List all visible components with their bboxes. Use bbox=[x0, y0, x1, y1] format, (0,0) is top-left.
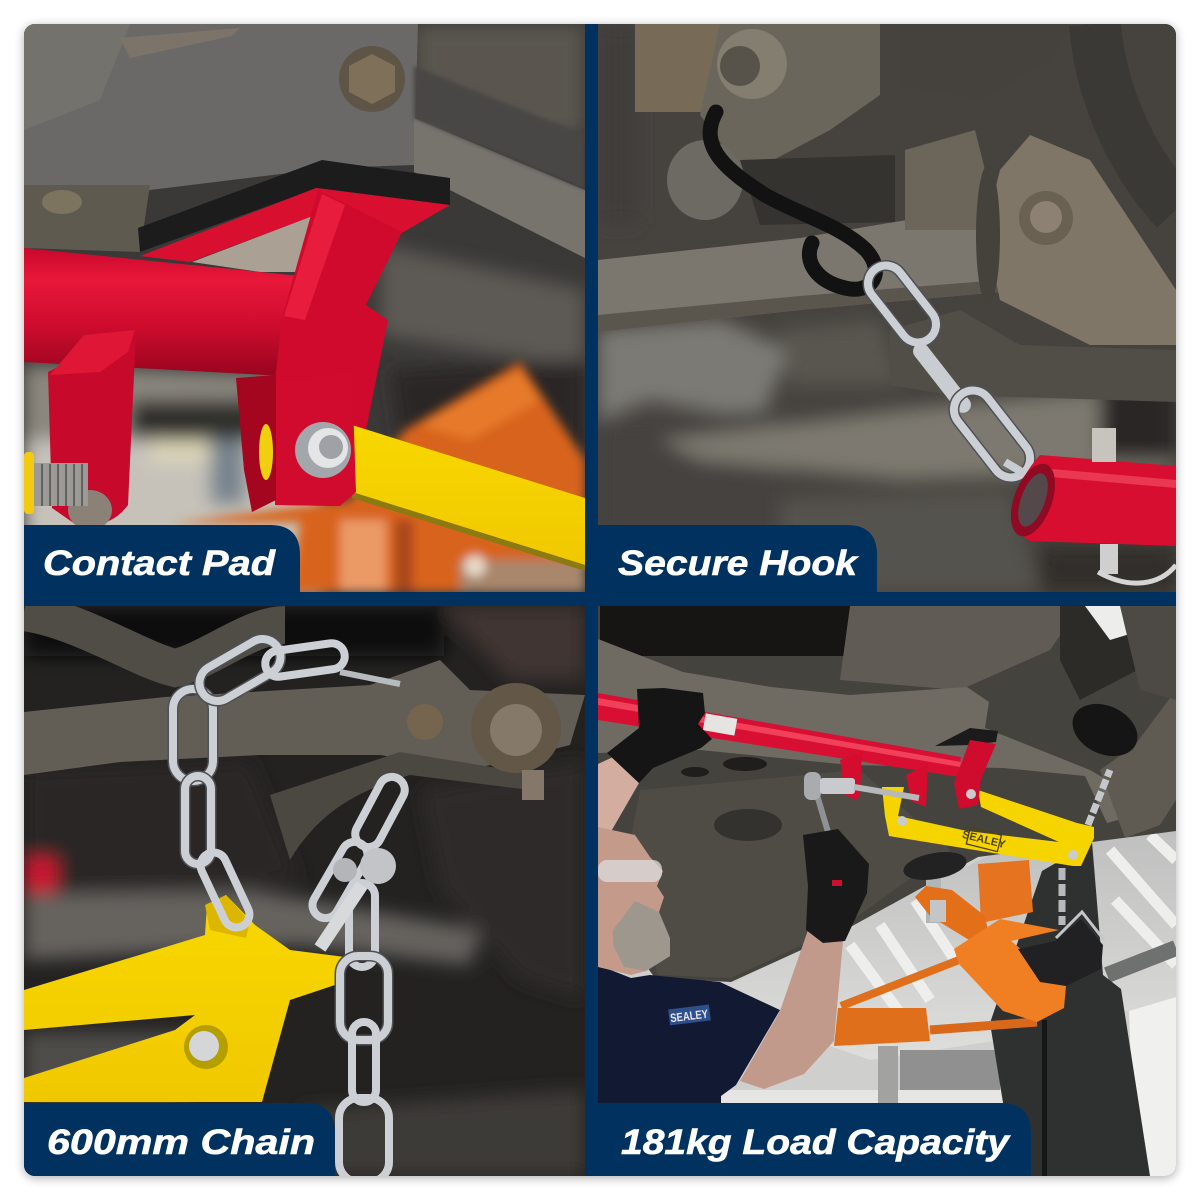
hanging chain bbox=[1058, 868, 1066, 925]
red tube bbox=[24, 248, 300, 376]
red bracket bbox=[954, 740, 996, 809]
bolt bbox=[339, 46, 405, 112]
crossmember bbox=[598, 639, 1158, 823]
lift post bbox=[990, 842, 1150, 1176]
suspension arm bbox=[598, 220, 998, 318]
suspension arm bbox=[414, 118, 585, 258]
mid junk bbox=[890, 310, 1176, 402]
chain bbox=[862, 260, 1036, 483]
yellow bar bbox=[352, 425, 585, 565]
label: contact pad bbox=[24, 525, 300, 592]
ratchet bbox=[804, 772, 919, 832]
hose bbox=[1095, 24, 1176, 210]
hub bbox=[1100, 690, 1176, 838]
label: contact pad: Contact Pad bbox=[43, 544, 276, 583]
cv boot bbox=[1072, 704, 1138, 756]
top assembly bbox=[635, 24, 720, 112]
right arm bbox=[740, 930, 843, 1089]
label: 600mm chain: 600mm Chain bbox=[47, 1123, 315, 1162]
mechanic: SEALEY bbox=[669, 1007, 709, 1025]
mechanic bbox=[598, 688, 869, 1176]
small lower bracket bbox=[48, 332, 136, 525]
orange jack background bbox=[170, 362, 585, 592]
red tube bbox=[1015, 455, 1176, 546]
gloves bbox=[607, 688, 712, 783]
label: 600mm chain bbox=[24, 1103, 335, 1176]
label: secure hook bbox=[585, 525, 877, 592]
workshop background bbox=[610, 856, 1176, 1176]
vehicle underside bbox=[598, 606, 1176, 982]
panel: 181kg load capacity bbox=[598, 606, 1176, 1176]
black hook bbox=[710, 112, 875, 289]
yellow frame bbox=[882, 787, 1094, 866]
chassis member bbox=[24, 24, 418, 190]
panel: secure hook bbox=[598, 24, 1176, 592]
chains bbox=[173, 632, 409, 1182]
left arm bbox=[598, 757, 639, 868]
red tube bbox=[598, 693, 961, 777]
black saddle bbox=[1018, 919, 1103, 986]
contact pad bbox=[138, 160, 450, 252]
orange jack bbox=[834, 848, 1066, 1046]
label: secure hook: Secure Hook bbox=[618, 544, 859, 583]
yellow arm bbox=[24, 895, 345, 1102]
lower panel of polo bbox=[598, 1100, 721, 1176]
polo bbox=[598, 965, 780, 1110]
SEALEY logo: SEALEY bbox=[961, 829, 1007, 851]
panel: 600mm chain bbox=[24, 606, 585, 1182]
panel: contact pad bbox=[24, 24, 585, 592]
label: 181kg load capacity bbox=[585, 1103, 1031, 1176]
label: 181kg load capacity: 181kg Load Capacity bbox=[621, 1123, 1011, 1162]
upper curved arm bbox=[24, 612, 285, 668]
head bbox=[598, 827, 670, 975]
bracket front plate bbox=[278, 425, 356, 506]
red bracket bbox=[275, 190, 402, 506]
pivot bolt bbox=[295, 422, 351, 478]
polo logo bbox=[668, 1005, 711, 1025]
bush housing bbox=[985, 135, 1176, 345]
main arm bbox=[24, 660, 585, 775]
